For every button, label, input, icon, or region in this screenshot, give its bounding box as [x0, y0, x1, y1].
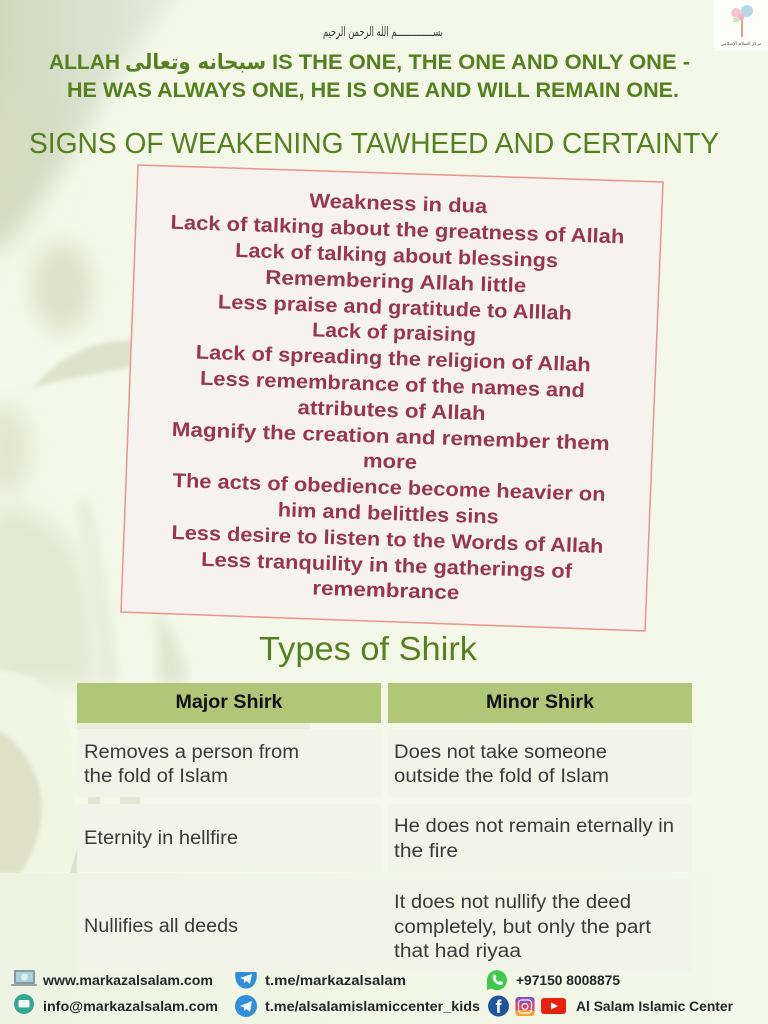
- row 1 major: Removes a person from: [84, 742, 299, 763]
- panel: signs list: Less praise and gratitude to Alllah: [218, 291, 572, 325]
- row 3 minor: that had riyaa: [394, 941, 521, 962]
- row 1 major: [77, 729, 381, 797]
- panel: signs list: [121, 165, 663, 631]
- telegram kids link: t.me/alsalamislamiccenter_kids: [265, 999, 480, 1014]
- row 1 minor: [388, 729, 692, 797]
- icon: whatsapp: [487, 970, 507, 990]
- background: [0, 0, 188, 873]
- website: www.markazalsalam.com: [42, 973, 213, 988]
- icon: youtube: [541, 998, 566, 1014]
- column header: major shirk: [77, 683, 381, 723]
- row 2 minor: the fire: [394, 841, 458, 862]
- column header: minor shirk: [388, 683, 692, 723]
- logo: [714, 0, 768, 51]
- column header: minor shirk: Minor Shirk: [486, 692, 594, 713]
- row 1 major: the fold of Islam: [84, 766, 228, 787]
- panel: signs list: Less desire to listen to the Words of Allah: [171, 522, 604, 558]
- heading: Allah is the One: HE WAS ALWAYS ONE, HE IS ONE AND WILL REMAIN ONE.: [67, 79, 679, 102]
- column header: major shirk: Major Shirk: [176, 692, 283, 713]
- icon: telegram channel: [235, 972, 257, 988]
- panel: signs list: more: [363, 450, 417, 474]
- row 3 minor: It does not nullify the deed: [394, 892, 631, 913]
- panel: signs list: Less remembrance of the names and: [200, 368, 585, 402]
- row 2 minor: [388, 804, 692, 872]
- icon: laptop: [11, 970, 37, 986]
- heading: types of shirk: Types of Shirk: [259, 630, 478, 667]
- panel: signs list: Lack of praising: [312, 319, 476, 347]
- icon: telegram kids: [235, 995, 257, 1017]
- heading: signs of weakening tawheed: SIGNS OF WEAKENING TAWHEED AND CERTAINTY: [29, 128, 719, 160]
- row 1 minor: outside the fold of Islam: [394, 766, 609, 787]
- row 3 minor: [388, 879, 692, 972]
- panel: signs list: The acts of obedience become heavier on: [172, 470, 606, 506]
- organisation name: Al Salam Islamic Center: [576, 999, 734, 1014]
- panel: signs list: him and belittles sins: [277, 499, 499, 529]
- panel: signs list: attributes of Allah: [297, 397, 486, 425]
- heading: Allah is the One: ALLAH: [49, 51, 120, 74]
- icon: mail: [14, 994, 34, 1014]
- row 2 minor: He does not remain eternally in: [394, 816, 674, 837]
- panel: signs list: Remembering Allah little: [265, 267, 527, 297]
- heading: Allah is the One: [49, 50, 690, 102]
- telegram channel link: t.me/markazalsalam: [265, 973, 406, 988]
- table: major vs minor shirk: [77, 683, 692, 972]
- phone: +97150 8008875: [516, 973, 620, 988]
- footer: contact details: [11, 970, 734, 1017]
- panel: signs list: Weakness in dua: [309, 190, 489, 218]
- panel: signs list: Lack of spreading the religion of Allah: [196, 342, 591, 376]
- panel: signs list: remembrance: [312, 578, 460, 604]
- icon: instagram: [516, 997, 534, 1016]
- row 2 major: Eternity in hellfire: [84, 828, 238, 849]
- heading: Allah is the One: IS THE ONE, THE ONE AND ONLY ONE -: [272, 51, 690, 74]
- row 1 minor: Does not take someone: [394, 742, 607, 763]
- row 3 major: [77, 879, 381, 972]
- heading: Allah is the One: سبحانه وتعالى: [125, 50, 266, 74]
- icon: facebook: f: [496, 997, 502, 1017]
- bismillah calligraphy: بســـــــــــــــم الله الرحمن الرحيم: [323, 25, 443, 40]
- panel: signs list: Lack of talking about the greatness of Allah: [170, 212, 625, 248]
- icon: facebook: [488, 996, 509, 1017]
- logo: مركز السلام الإسلامي: [721, 41, 762, 47]
- row 3 major: Nullifies all deeds: [84, 916, 238, 937]
- panel: signs list: Lack of talking about blessings: [235, 240, 558, 272]
- email: info@markazalsalam.com: [43, 999, 218, 1014]
- row 3 minor: completely, but only the part: [394, 917, 652, 938]
- panel: signs list: Less tranquility in the gatherings of: [201, 549, 573, 583]
- panel: signs list: Magnify the creation and remember them: [172, 419, 610, 455]
- row 2 major: [77, 804, 381, 872]
